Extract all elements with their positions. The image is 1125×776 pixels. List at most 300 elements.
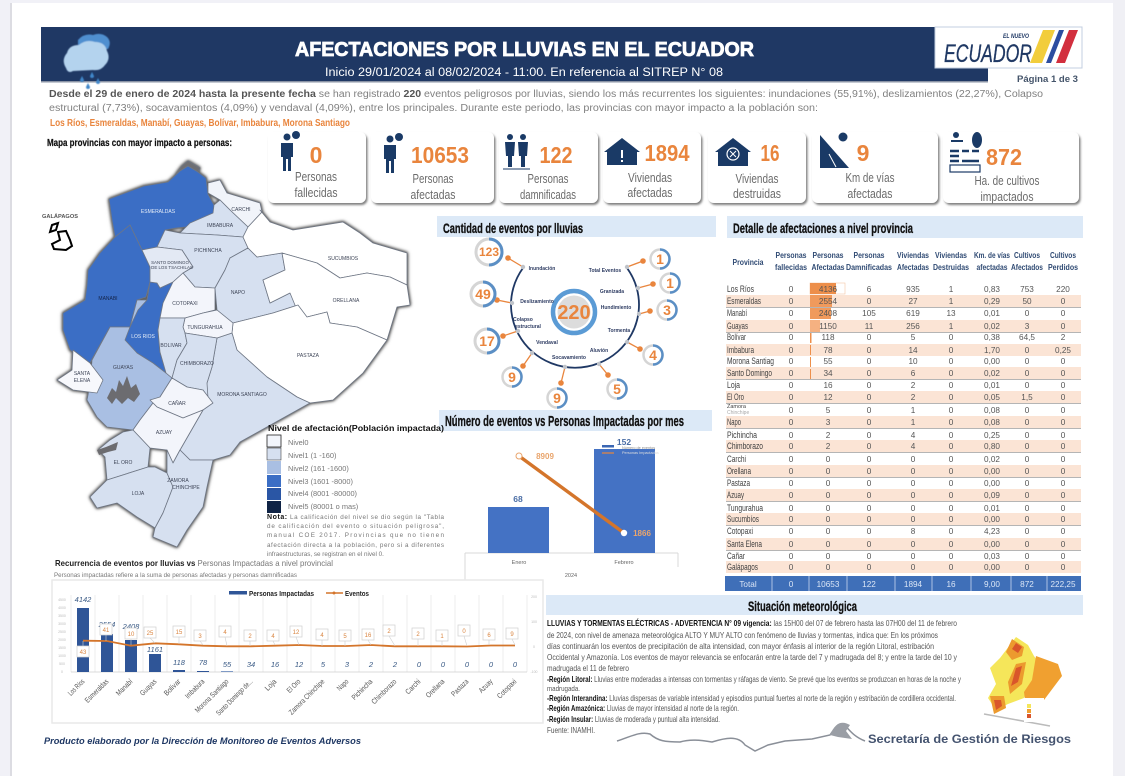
gridlines [71,595,527,672]
event labels: Socavamiento [552,355,586,361]
row: El Oro: El Oro [727,392,744,402]
column headers [732,251,1078,272]
row: Carchi: Carchi [727,454,746,464]
bubble: 1 [660,274,680,292]
row: Sucumbíos: 0 [949,515,954,524]
event labels: Tormenta [608,328,630,334]
row: Pastaza: 0 [789,479,794,488]
row: Cañar: 0,03 [984,552,1000,561]
map labels: LOJA [132,491,145,497]
column headers: afectadas [976,263,1008,272]
row: Manabí: Manabí [727,308,747,318]
bubble: 9 [548,388,566,408]
card: km de vías afectadas: Km de vías [846,170,895,185]
row: Tungurahua: 0,01 [984,504,1000,513]
map labels: DE LOS TSACHILAS [151,265,193,270]
bar values: 55 [223,660,232,669]
row: Manabí: 0 [789,309,794,318]
bubble: 9: 9 [553,390,561,406]
row: Cañar: 0 [789,552,794,561]
row: Santa Elena: 0 [826,540,831,549]
intro paragraph: Desde el 29 de enero de 2024 hasta la presente fecha se han registrado 220 eventos peligrosos por lluvias, siendo los más recurrentes los siguientes: inundaciones (55,91%), deslizamientos (22,27%), Colapso [49,89,1043,100]
row: Guayas: Guayas [727,321,748,331]
row: Chimborazo: 4 [911,442,916,451]
heading: situación meteorológica: Situación meteorológica [748,598,857,614]
row: Pastaza: 0 [949,479,954,488]
row: Loja: 0 [1061,381,1066,390]
row: Cañar: 0 [949,552,954,561]
row: Morona Santiago: 0 [1061,357,1066,366]
row: Total: 1894 [904,580,923,589]
row: Pastaza: 0 [1061,479,1066,488]
category labels: Morona Santiago [193,677,230,715]
row: Pichincha: 0 [867,431,872,440]
row: Santo Domingo: 0 [1061,369,1066,378]
row: Sucumbíos: Sucumbíos [727,514,759,524]
event callouts: 3 [198,634,202,640]
axis ticks: 4000 [58,606,66,610]
subtitle: Inicio 29/01/2024 al 08/02/2024 - 11:00. En referencia al SITREP N° 08 [325,67,723,79]
row: Cañar: 0 [826,552,831,561]
legend: Personas Impactadas [249,589,314,598]
row: Tungurahua: 0 [789,504,794,513]
row: Morona Santiago: Morona Santiag [727,356,774,366]
note: Nota: La calificación del nivel se dio según la "Tabla [267,514,444,521]
axis ticks: -100 [530,670,538,674]
bar values: 0 [441,660,446,669]
row: Tungurahua: 0 [1061,504,1066,513]
event labels: Inundación [529,266,555,272]
row: Azuay: 0 [1025,491,1030,500]
map labels: MANABI [98,296,118,302]
panel: events radial chart [471,239,680,408]
bubble: 123 [476,239,502,265]
bubble: 3: 3 [663,302,671,318]
KPI cards [268,131,1079,204]
row: Santa Elena: 0 [867,540,872,549]
row: Azuay: 0 [911,491,916,500]
row: Galápagos: 0 [789,563,794,572]
legend: Eventos [345,589,369,598]
bar values: 2408 [122,622,140,631]
bubble: 49 [471,282,495,306]
row: Carchi: 0 [826,455,831,464]
axis ticks: 500 [59,662,65,666]
weather text: -Región Insular: Lluvias de moderada y puntual alta intensidad. [547,714,720,724]
row: Esmeraldas: 27 [908,297,918,306]
chart: events vs people by month [465,437,678,580]
bubble: 9: 9 [508,369,516,385]
heading: cantidad de eventos [437,216,716,237]
row: Carchi: 0 [1025,455,1030,464]
card: viviendas destruidas: 16 [760,140,780,166]
row: Sucumbíos: 0 [826,515,831,524]
event callouts: 2 [387,629,391,635]
event callouts: 0 [462,629,466,635]
row: Manabí: 13 [946,309,956,318]
map heading: Mapa provincias con mayor impacto a personas: [47,138,232,149]
row: Los Ríos: 4136 [819,285,838,294]
heading: detalle provincia [727,216,1083,238]
row stripes [726,295,1081,573]
row: Pichincha: Pichincha [727,430,757,440]
map labels: EL ORO [114,460,132,466]
row: Bolívar: Bolívar [727,332,746,342]
category labels: Guayas [138,677,159,698]
row: Imbabura: Imbabura [727,345,754,355]
row: Orellana: 0 [911,467,916,476]
weather text: Fuente: INAMHI. [547,725,595,735]
row: Los Ríos: 753 [1020,285,1034,294]
row: Guayas: 256 [906,322,920,331]
row: Carchi: 0 [949,455,954,464]
row: Esmeraldas: 50 [1022,297,1032,306]
row: Total: 10653 [817,580,840,589]
provinces [57,161,410,547]
row: Imbabura: 1,70 [984,346,1000,355]
row: Azuay: 0 [789,491,794,500]
row: Galápagos: 0 [1025,563,1030,572]
row: Santa Elena: 0 [949,540,954,549]
event labels: Colapso [513,317,533,323]
map labels: ZAMORA [167,478,189,484]
row: Carchi: 0 [911,455,916,464]
bubble: 5: 5 [613,381,621,397]
row: Imbabura: 0 [949,346,954,355]
row: Esmeraldas: 2554 [819,297,838,306]
bars [488,507,549,553]
row: Sucumbíos: 0,00 [984,515,1000,524]
event callouts: 9 [510,632,514,638]
event labels [513,266,631,361]
chart: recurrence by province [52,580,543,723]
axis labels: Enero [512,560,526,566]
row: Santa Elena: 0 [789,540,794,549]
legend [229,589,369,598]
row: Los Ríos: 6 [867,285,872,294]
row: El Oro: 0 [789,393,794,402]
map labels: SUCUMBIOS [328,256,359,262]
row: Napo: 0 [1025,418,1030,427]
row: El Oro: 12 [823,393,833,402]
row: Cotopaxi: 8 [911,527,916,536]
weather text: -Región Litoral: Lluvias entre moderadas a intensas con tormentas y ráfagas de viento. Se prevé que los eventos se produzcan en horas de la noche y [547,674,962,684]
event labels: Deslizamiento [520,299,554,305]
row: Napo: 0,08 [984,418,1000,427]
card: viviendas afectadas: afectadas [628,185,673,200]
row: Chimborazo: 0,80 [984,442,1000,451]
map legend: Nivel3 (1601 -8000) [288,477,353,486]
category labels: Esmeraldas [83,677,111,705]
card: personas fallecidas: 0 [310,142,322,168]
row: Orellana: 0 [789,467,794,476]
axis ticks: 1000 [58,654,66,658]
event labels: Total Eventos [589,268,621,274]
row: Imbabura: 78 [823,346,833,355]
row: Santa Elena: 0 [911,540,916,549]
event callouts: 1 [440,634,444,640]
column headers: Perdidos [1048,263,1078,272]
row: Sucumbíos [727,514,1066,524]
Galápagos islands [50,223,72,250]
column headers: Km. de vías [974,251,1010,260]
map labels: MORONA SANTIAGO [217,392,267,398]
center total: 220 [557,302,591,324]
column headers: Afectadas [897,263,929,272]
row: Chimborazo: 0 [949,442,954,451]
row: Loja: 2 [911,381,916,390]
card: hectáreas de cultivos [943,132,1079,204]
row: Orellana: 0 [949,467,954,476]
map labels: TUNGURAHUA [187,325,223,331]
map labels: CARCHI [231,207,251,213]
row: Cotopaxi: 0 [1025,527,1030,536]
bar values: 12 [295,660,304,669]
column headers: Destruidas [933,263,969,272]
column headers: Personas [776,251,807,260]
row: Guayas [727,321,1066,331]
heading: eventos vs personas [439,410,712,431]
row: Chimborazo: Chimborazo [727,441,763,451]
row: Sucumbíos: 0 [867,515,872,524]
row: Manabí: 105 [862,309,876,318]
row: Zamora Chinchipe: 0 [1061,406,1066,415]
row: Galápagos: 0 [949,563,954,572]
row: Bolívar: 0 [867,333,872,342]
page number: Página 1 de 3 [1017,74,1078,84]
row: Santo Domingo: 0 [1025,369,1030,378]
row: Cotopaxi: 0 [826,527,831,536]
row: Santa Elena: Santa Elena [727,539,762,549]
bubble: 49: 49 [475,286,491,302]
row: Zamora Chinchipe: Chinchipe [727,410,749,416]
row: Napo: 0 [949,418,954,427]
row: Pichincha: 0 [1061,431,1066,440]
axis ticks: 0 [61,670,63,674]
bubble: 5 [608,380,627,398]
row: El Oro: 2 [911,393,916,402]
row: Tungurahua: 0 [826,504,831,513]
row: Azuay: 0 [949,491,954,500]
row: El Oro: 0,05 [984,393,1000,402]
row: Orellana: 0 [1025,467,1030,476]
row: Cotopaxi: 0 [867,527,872,536]
card: km de vías afectadas [812,132,938,203]
row: Manabí: 2408 [819,309,838,318]
bar values: 118 [173,658,186,667]
row: Esmeraldas: 0 [789,297,794,306]
weather text: -Región Interandina: Lluvias dispersas de variable intensidad y episodios puntual fuertes al norte de la región y estribación de cordillera occidental. [547,693,956,703]
row: Cotopaxi [727,526,1066,536]
card: personas afectadas: afectadas [410,187,456,202]
row: Carchi: 0 [789,455,794,464]
event labels: Granizada [600,289,624,295]
row: Bolívar: 0,38 [984,333,1000,342]
category labels: Zamora Chinchipe [287,677,326,717]
row: Imbabura: 14 [908,346,918,355]
row: Morona Santiago: 0 [949,357,954,366]
row: Cañar: 0 [1025,552,1030,561]
axis ticks: 0 [533,645,535,649]
row: Guayas: 3 [1025,322,1030,331]
row: Los Ríos: 935 [906,285,920,294]
heading: situación meteorológica [546,595,1083,615]
row: Sucumbíos: 0 [789,515,794,524]
row: Galápagos: 0 [826,563,831,572]
row: Sucumbíos: 0 [1061,515,1066,524]
event callouts: 43 [80,650,87,656]
category labels: Azuay [477,677,495,695]
bubble: 1 [650,250,670,268]
row: Carchi: 0 [867,455,872,464]
map labels [42,207,360,497]
bar values: 0 [489,660,494,669]
row: Pastaza: 0,00 [984,479,1000,488]
row: Loja [727,380,1066,390]
map legend: Nivel4 (8001 -80000) [288,489,357,498]
row: Napo: 1 [911,418,916,427]
row: Zamora Chinchipe: 0 [1025,406,1030,415]
connectors [497,258,653,383]
data bars [810,283,845,379]
row: Zamora Chinchipe: 0 [949,406,954,415]
map labels: PASTAZA [297,353,320,359]
heading: cantidad de eventos: Cantidad de eventos por lluvias [443,220,583,236]
title: AFECTACIONES POR LLUVIAS EN EL ECUADOR [295,38,754,61]
row: Manabí: 0 [1025,309,1030,318]
row: Zamora Chinchipe: 5 [826,406,831,415]
panel: province map [42,161,410,547]
axis ticks [58,595,538,674]
logo: El Nuevo Ecuador [935,27,1082,68]
bar values: 4142 [75,595,92,604]
category labels: Loja [263,677,279,693]
map labels: ESMERALDAS [141,209,176,215]
row: El Oro [727,392,1066,402]
heading: eventos vs personas: Número de eventos vs Personas Impactadas por mes [445,413,684,430]
row: Manabí: 0,01 [984,309,1000,318]
row: Imbabura: 0,25 [1055,346,1071,355]
card: hectáreas de cultivos: impactados [980,189,1034,204]
map labels: NAPO [231,290,245,296]
row: Morona Santiago: 0 [789,357,794,366]
bar values: 0 [513,660,518,669]
card: personas fallecidas: Personas [295,169,337,184]
row: Pichincha: 4 [911,431,916,440]
axis ticks: 2500 [58,630,66,634]
bar values: 2554 [98,620,115,629]
row: Cañar: 0 [1061,552,1066,561]
bar values: 16 [271,660,280,669]
category labels [66,677,519,717]
weather text: madrugada el 11 de febrero [547,663,629,673]
map legend: Nivel0 [288,438,309,447]
row: Tungurahua: Tungurahua [727,503,763,513]
row: Azuay: 0 [867,491,872,500]
event callouts: 16 [365,633,372,639]
row: Cotopaxi: 0 [949,527,954,536]
row: Tungurahua: 0 [911,504,916,513]
row: Napo: 0 [789,418,794,427]
row: Bolívar [727,332,1066,342]
chart: events vs people by month: 152 [617,437,631,447]
row: Total: 872 [1020,580,1034,589]
affected provinces list: Los Ríos, Esmeraldas, Manabí, Guayas, Bolívar, Imbabura, Morona Santiago [50,118,350,129]
map labels: BOLIVAR [160,343,182,349]
icon: rain cloud [64,34,110,89]
category labels: Orellana [424,677,447,700]
row: Los Ríos: 0,83 [984,285,1000,294]
row: Santa Elena [727,539,1066,549]
category labels: Pastaza [449,677,471,698]
gulf islands [107,376,140,404]
row: Morona Santiago: 10 [908,357,918,366]
event callouts: 41 [103,628,110,634]
row: Pichincha: 0 [1025,431,1030,440]
map labels: ELENA [74,378,91,384]
row: Chimborazo: 0 [789,442,794,451]
row: Cotopaxi: 0 [789,527,794,536]
row: Total: 222,25 [1050,580,1076,589]
event labels: estructural [515,324,542,330]
map labels: CAÑAR [168,400,186,407]
event callouts: 12 [293,630,300,636]
row: Bolívar: 118 [821,333,835,342]
column headers: Personas [854,251,885,260]
row: Galápagos: 0 [867,563,872,572]
row: Loja: 16 [823,381,833,390]
row: Morona Santiago: 55 [823,357,833,366]
row: Bolívar: 64,5 [1019,333,1035,342]
row: Guayas: 0 [789,322,794,331]
row: Santo Domingo: 34 [823,369,833,378]
weather text: LLUVIAS Y TORMENTAS ELÉCTRICAS - ADVERTENCIA N° 09 vigencia: las 15H00 del 07 de febrero hasta las 07H00 del 11 de febrero [547,618,957,628]
row: Napo: 0 [1061,418,1066,427]
event labels: Aluvión [590,348,608,354]
bar values: 3 [345,660,350,669]
row: Morona Santiago [727,356,1066,366]
row: Pichincha: 2 [826,431,831,440]
axis ticks: 3500 [58,614,66,618]
row: Azuay [727,490,1066,500]
map labels: GUAYAS [113,365,134,371]
card: hectáreas de cultivos: Ha. de cultivos [974,173,1040,188]
row: Total: 9,00 [984,580,1000,589]
row: Santo Domingo [727,368,1066,378]
map legend: Nivel2 (161 -1600) [288,464,349,473]
logo: El Nuevo Ecuador: EL NUEVO [1003,33,1029,40]
row: Total: 0 [789,580,794,589]
event callouts [77,624,518,657]
row: Guayas: 0,02 [984,322,1000,331]
card: personas damnificadas: damnificadas [520,187,576,202]
row: Tungurahua [727,503,1066,513]
row: Loja: 0,01 [984,381,1000,390]
bubble: 17 [475,329,499,353]
note: infraestructuras, se registran en el nivel 0. [267,551,384,558]
bubble: 1: 1 [656,251,664,267]
card: personas afectadas [371,132,494,203]
row: Carchi [727,454,1066,464]
logo: Secretaría de Gestión de Riesgos [617,723,1071,751]
weather text: -Región Amazónica: Lluvias de mayor intensidad al norte de la región. [547,703,739,713]
event labels: Hundimiento [601,305,631,311]
card: hectáreas de cultivos: 872 [986,144,1022,170]
line values: 8909 [536,452,554,461]
row: Galápagos: 0 [911,563,916,572]
row: Imbabura: 0 [1025,346,1030,355]
bar values: 2 [368,660,374,669]
